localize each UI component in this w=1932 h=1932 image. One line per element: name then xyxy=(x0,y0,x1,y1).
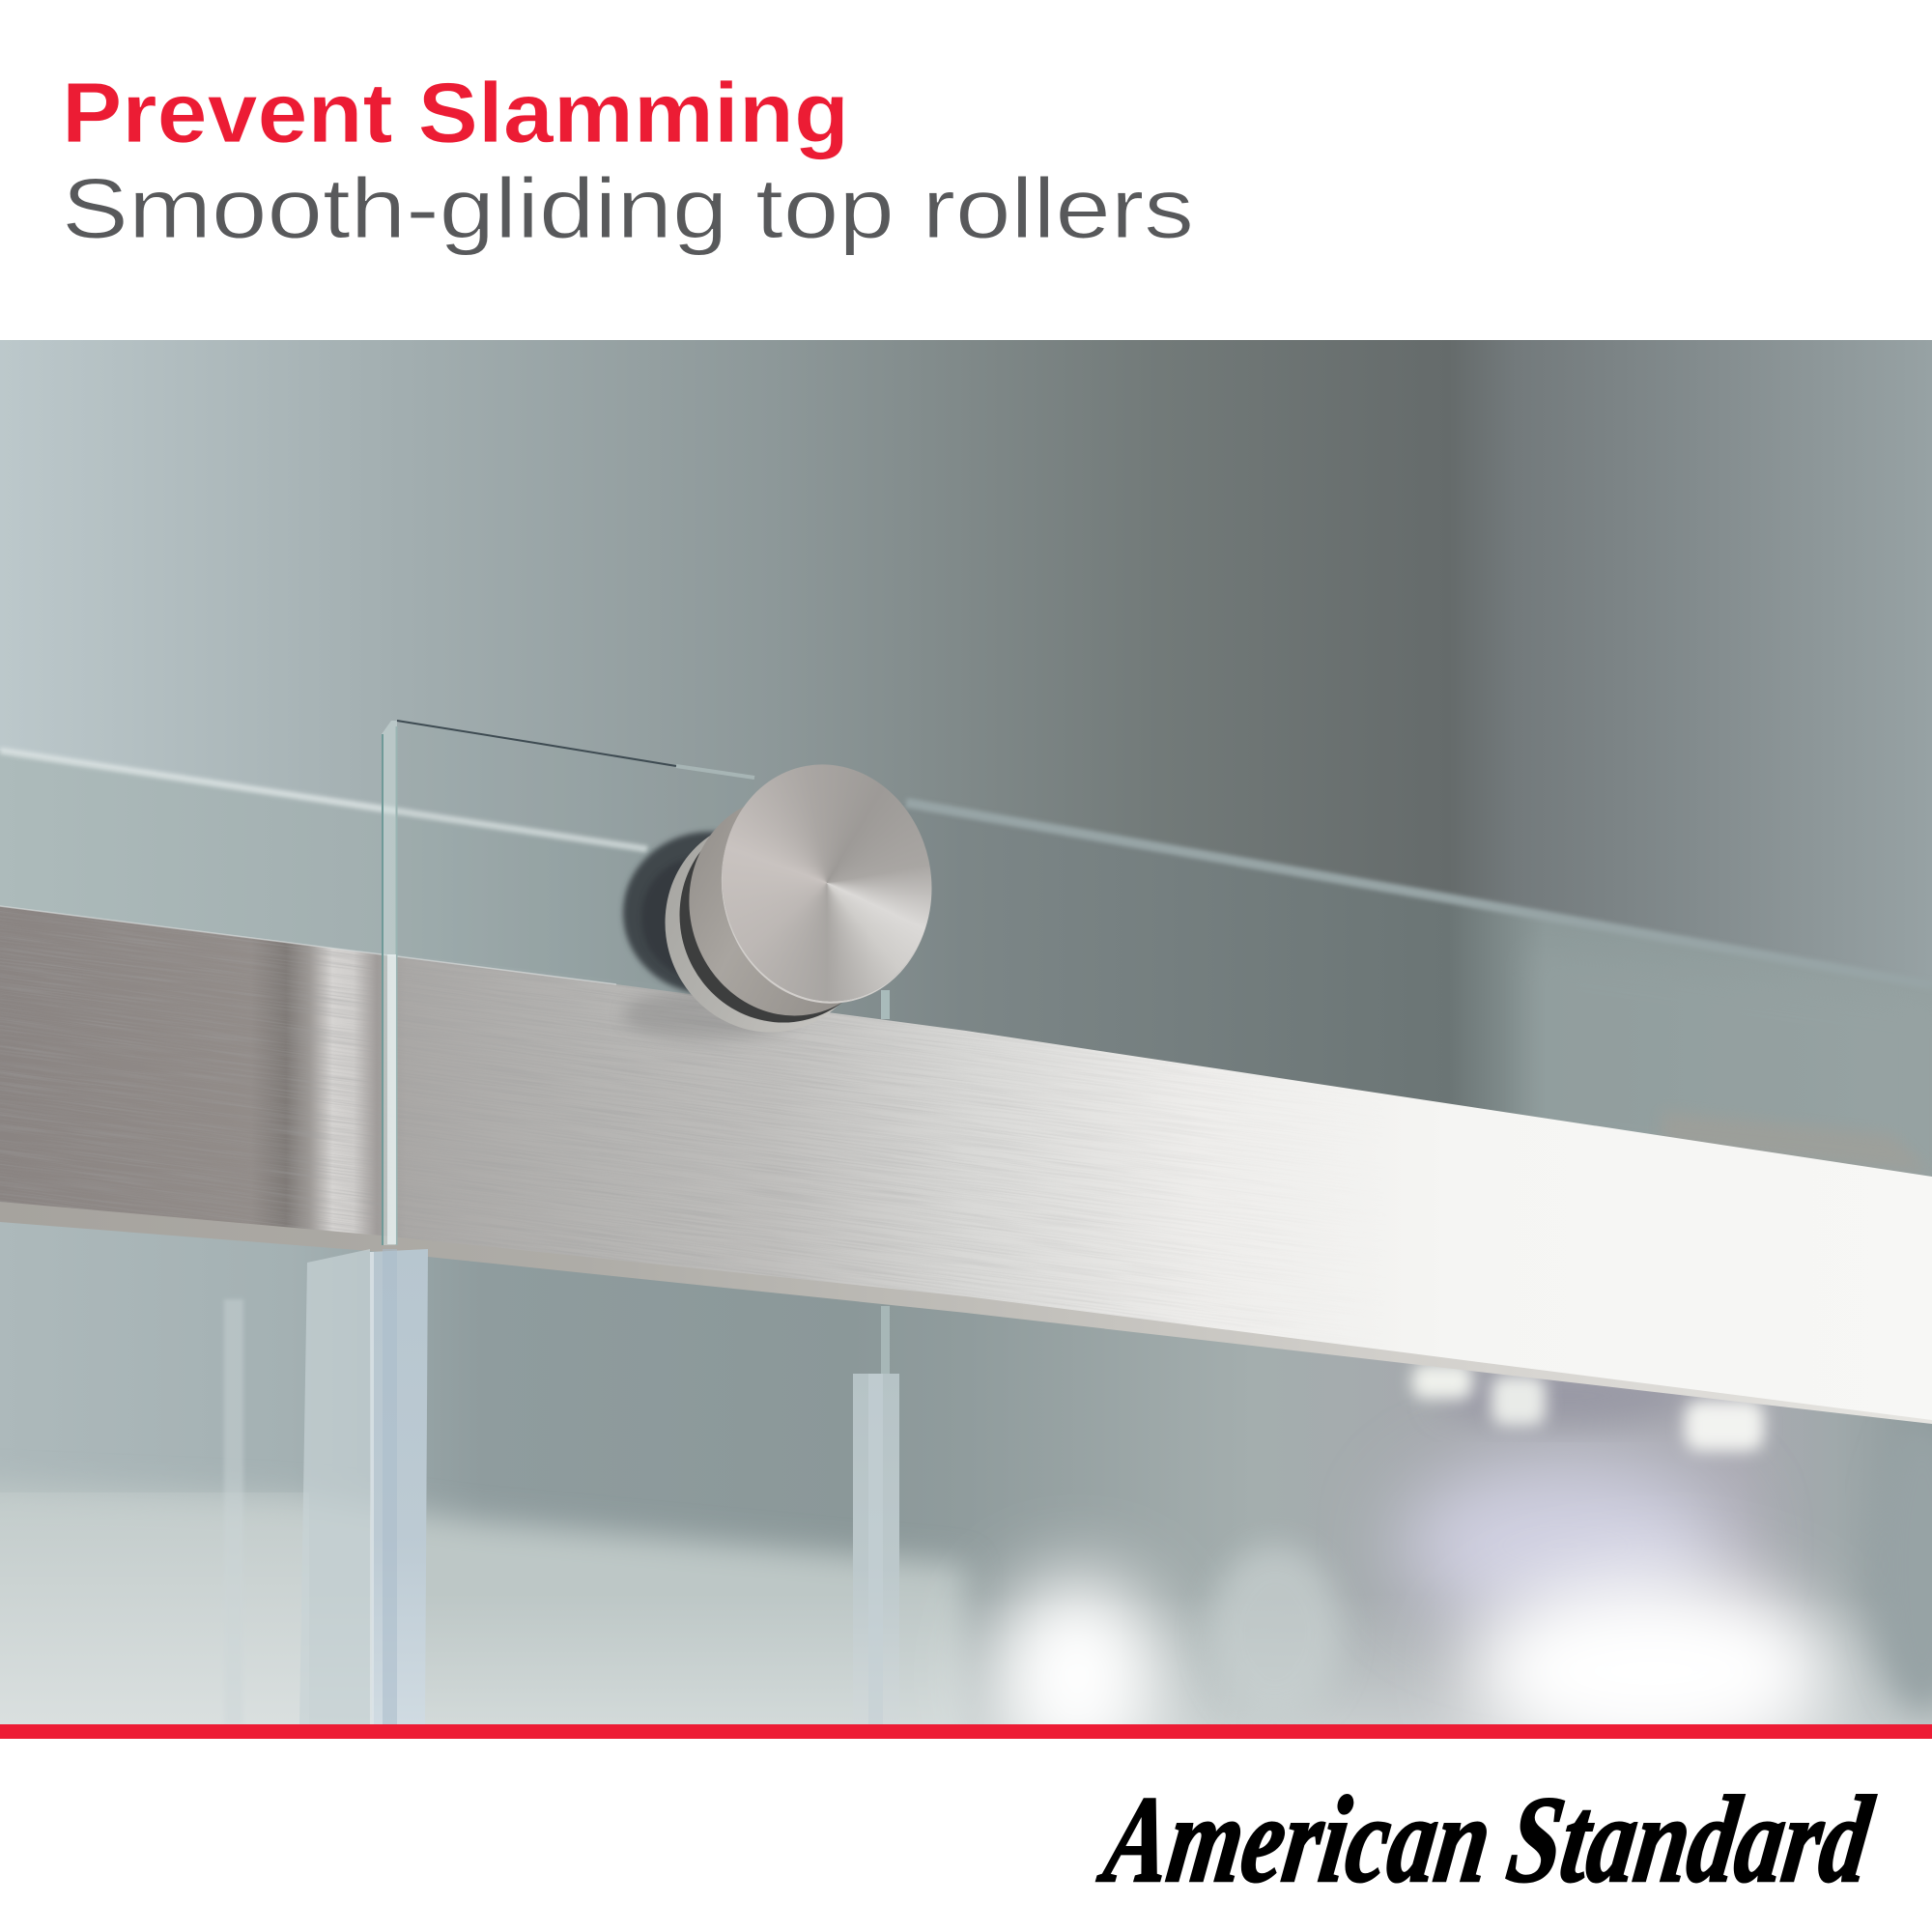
logo: American Standard xyxy=(1093,1771,1880,1908)
red divider bar xyxy=(0,1724,1932,1739)
frosted seal behind glass xyxy=(299,1249,370,1724)
knob body xyxy=(667,775,914,1037)
roller knob xyxy=(620,765,931,1032)
right door seal xyxy=(853,1306,899,1724)
knob face xyxy=(703,748,951,1018)
glass bottom seal xyxy=(370,1249,428,1724)
glass reflection panel xyxy=(402,811,403,812)
logo: American Standard: American xyxy=(1093,1771,1499,1908)
rubber gasket xyxy=(620,829,715,996)
rear frosted door panels xyxy=(0,747,1901,1167)
blurred ceiling lights xyxy=(1412,1364,1764,1451)
brushed metal rail xyxy=(0,905,1932,1424)
dark groove xyxy=(652,786,909,1049)
wall background xyxy=(0,340,1932,985)
title: Prevent Slamming: Prevent Slamming xyxy=(62,65,849,160)
blurred room below the rail xyxy=(0,1256,1932,1724)
subtitle: Smooth-gliding top rollers: Smooth-gliding top rollers xyxy=(62,160,1194,256)
silver ring xyxy=(638,792,898,1059)
faint left seal reflection xyxy=(224,1299,243,1499)
glass panel edge xyxy=(382,721,754,1245)
photo: shower door top rail xyxy=(0,340,1932,1787)
